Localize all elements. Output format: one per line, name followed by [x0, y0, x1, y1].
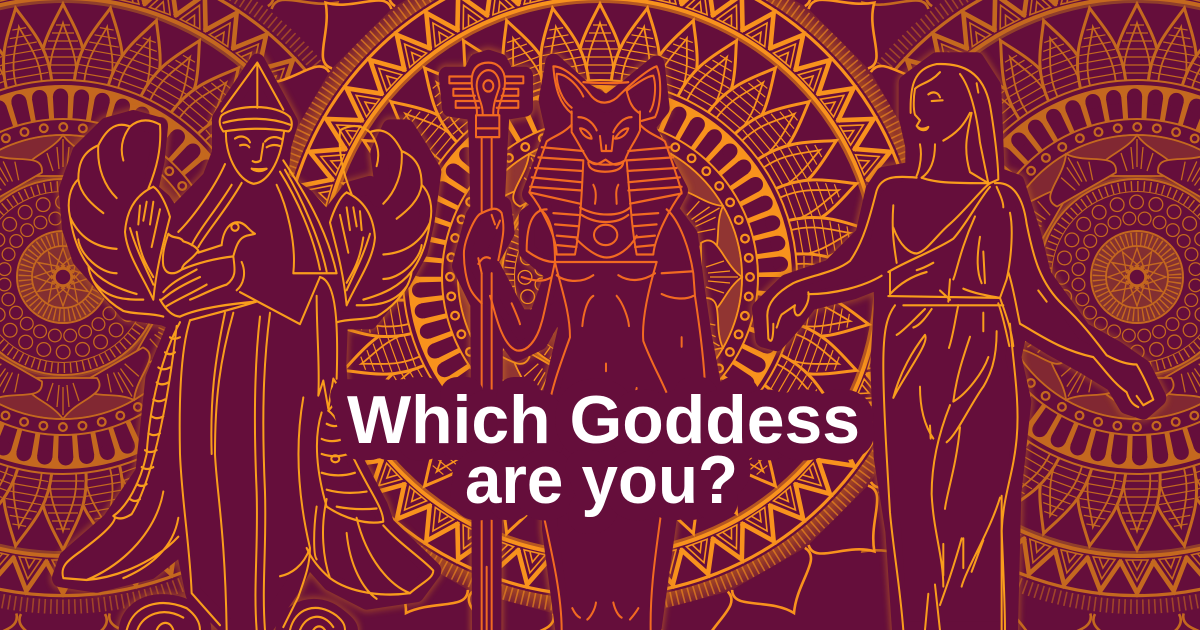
- title halo: [347, 382, 860, 518]
- title: Which Goddess are you?: [347, 382, 860, 518]
- goddess: cat-headed figure with staff: [447, 59, 718, 630]
- title halo: Which Goddess: [347, 382, 860, 458]
- title text: [347, 382, 860, 518]
- soft glow: [60, 63, 433, 630]
- goddess: winged figure with dove: [60, 63, 433, 630]
- soft glow: [447, 59, 718, 630]
- mandala: left: [0, 0, 470, 630]
- title halo: are you?: [465, 442, 738, 518]
- goddess: draped figure with outstretched arms: [760, 61, 1158, 630]
- silhouette: [60, 63, 433, 630]
- title text: Which Goddess: [347, 382, 860, 458]
- mandala: right: [689, 0, 1200, 630]
- mandala: centre: [152, 0, 1007, 630]
- soft glow: [760, 61, 1158, 630]
- title text: are you?: [465, 442, 738, 518]
- line art: [449, 63, 705, 630]
- line art: [62, 63, 433, 630]
- line art: [767, 64, 1153, 630]
- silhouette: [447, 59, 718, 630]
- silhouette: [760, 61, 1158, 630]
